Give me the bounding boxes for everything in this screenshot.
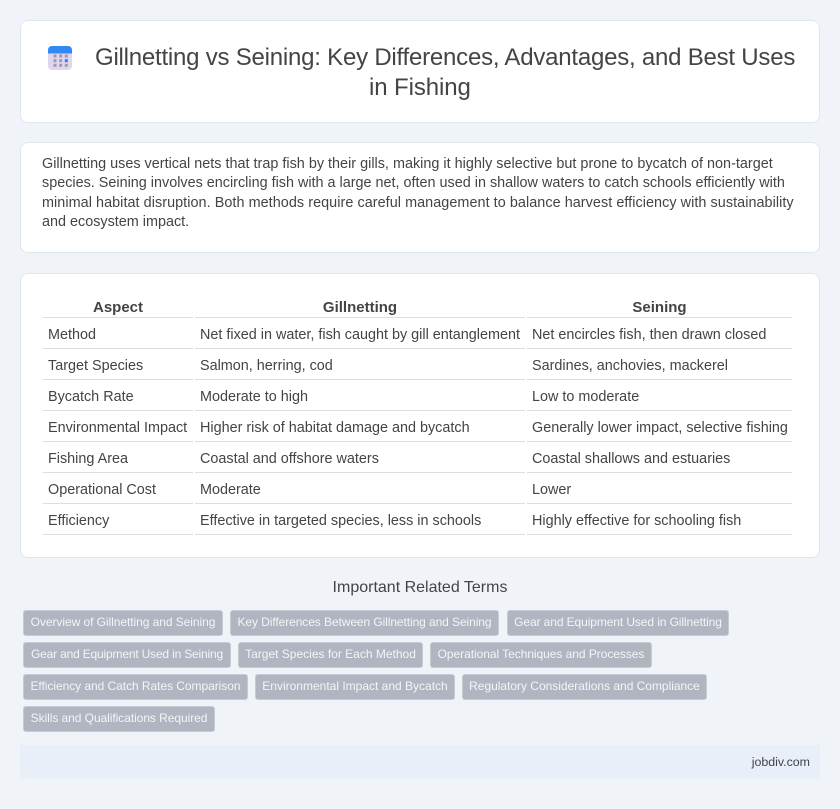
summary text: species. Seining involves encircling fish with a large net, often used in shallow waters to catch schools efficiently with <box>42 175 785 191</box>
comparison table: Moderate to high <box>200 389 308 405</box>
comparison table: Salmon, herring, cod <box>200 358 333 374</box>
comparison table: Coastal and offshore waters <box>200 451 379 467</box>
comparison table: Lower <box>532 482 571 498</box>
comparison table: Bycatch Rate <box>48 389 134 405</box>
comparison table: Aspect <box>93 299 143 316</box>
related terms tags <box>23 610 729 732</box>
comparison table: Low to moderate <box>532 389 639 405</box>
title panel <box>20 20 820 123</box>
footer source text: jobdiv.com <box>752 755 810 769</box>
comparison table: Net fixed in water, fish caught by gill entanglement <box>200 327 520 343</box>
related terms tags: Target Species for Each Method <box>245 647 416 661</box>
comparison table: Coastal shallows and estuaries <box>532 451 730 467</box>
related terms tags: Gear and Equipment Used in Gillnetting <box>514 615 722 629</box>
related terms tags: Regulatory Considerations and Compliance <box>469 679 700 693</box>
heading: in Fishing <box>369 74 471 101</box>
related terms tags: Skills and Qualifications Required <box>31 711 207 725</box>
comparison table: Highly effective for schooling fish <box>532 513 741 529</box>
comparison table: Effective in targeted species, less in schools <box>200 513 481 529</box>
icon: calendar <box>48 46 72 70</box>
heading <box>95 44 795 101</box>
related terms tags: Efficiency and Catch Rates Comparison <box>30 679 241 693</box>
comparison table: Fishing Area <box>48 451 128 467</box>
comparison table: Efficiency <box>48 513 109 529</box>
comparison table: Higher risk of habitat damage and bycatch <box>200 420 470 436</box>
summary text: and ecosystem impact. <box>42 214 189 230</box>
related terms tags: Overview of Gillnetting and Seining <box>31 615 215 629</box>
comparison table <box>43 299 792 535</box>
panel: comparison table <box>20 273 820 558</box>
related terms tags: Gear and Equipment Used in Seining <box>31 647 223 661</box>
comparison table: Net encircles fish, then drawn closed <box>532 327 766 343</box>
related terms tags: Key Differences Between Gillnetting and Seining <box>238 615 491 629</box>
comparison table: Environmental Impact <box>48 420 187 436</box>
comparison table: Gillnetting <box>323 299 397 316</box>
panel: summary <box>20 142 820 253</box>
comparison table: Moderate <box>200 482 261 498</box>
related terms tags: Environmental Impact and Bycatch <box>262 679 448 693</box>
comparison table: Operational Cost <box>48 482 156 498</box>
related terms heading: Important Related Terms <box>333 579 507 596</box>
related terms tags: Operational Techniques and Processes <box>438 647 644 661</box>
comparison table: Seining <box>632 299 687 316</box>
footer bar <box>20 745 820 779</box>
heading: Gillnetting vs Seining: Key Differences, Advantages, and Best Uses <box>95 44 795 71</box>
summary text: Gillnetting uses vertical nets that trap fish by their gills, making it highly selective but prone to bycatch of non-target <box>42 156 773 172</box>
comparison table: Sardines, anchovies, mackerel <box>532 358 728 374</box>
comparison table: Generally lower impact, selective fishing <box>532 420 788 436</box>
summary text <box>42 156 794 230</box>
comparison table: Method <box>48 327 96 343</box>
summary text: minimal habitat disruption. Both methods require careful management to balance harvest efficiency with sustainability <box>42 195 794 211</box>
comparison table: Target Species <box>48 358 143 374</box>
